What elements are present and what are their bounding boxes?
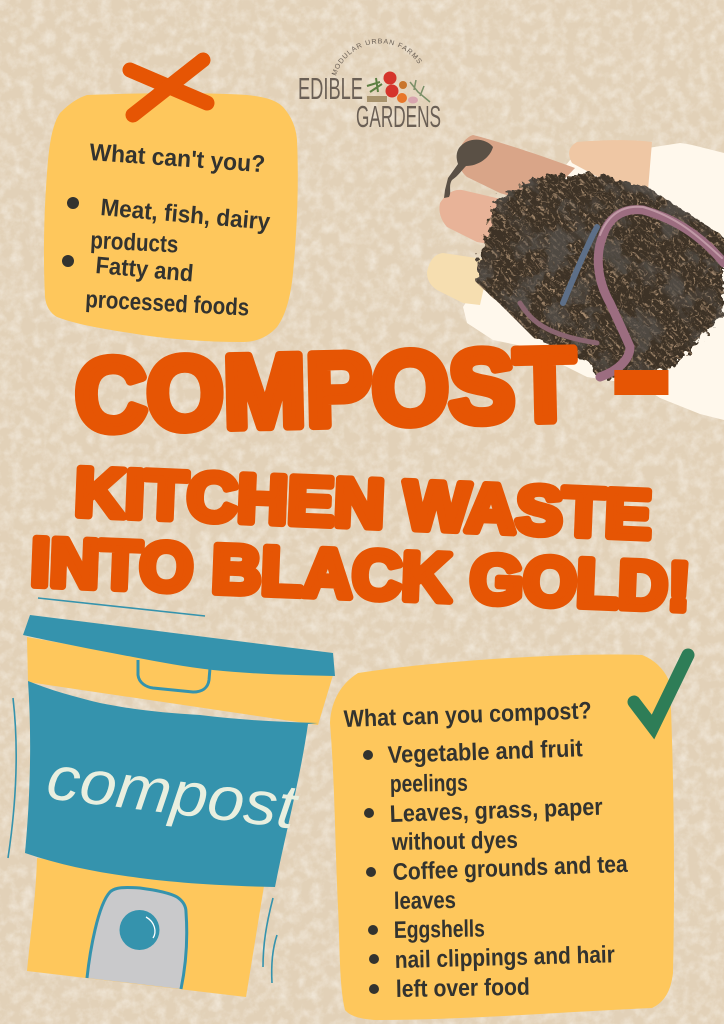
bin body xyxy=(25,681,318,887)
icon: red cross xyxy=(130,60,207,115)
list: can compost: left over food xyxy=(396,974,530,1003)
bin label: compost xyxy=(43,743,303,843)
title dash: - xyxy=(606,247,677,482)
list: can't compost: processed foods xyxy=(85,286,250,322)
bin lid xyxy=(23,615,335,676)
list: can't compost: Meat, fish, dairy xyxy=(99,194,272,236)
list: can't compost xyxy=(62,194,272,322)
bin base xyxy=(27,858,264,997)
hand: ring finger xyxy=(427,253,490,305)
motion lines xyxy=(8,598,277,983)
list: can compost: Coffee grounds and tea xyxy=(392,851,629,886)
logo: edible gardens: GARDENS xyxy=(356,99,441,134)
hand: top finger xyxy=(569,140,652,190)
panel: what you can't compost xyxy=(44,60,298,342)
list: can compost: without dyes xyxy=(391,827,518,856)
logo: edible gardens xyxy=(298,38,441,134)
title line 2: KITCHEN WASTE xyxy=(73,454,653,553)
list: can compost xyxy=(363,735,629,1003)
bin button xyxy=(120,910,160,950)
icon: green check xyxy=(634,655,688,727)
worms xyxy=(520,207,724,377)
list: can compost: Leaves, grass, paper xyxy=(389,794,603,828)
list: can't compost: Fatty and xyxy=(94,252,194,288)
title line 3: INTO BLACK GOLD! xyxy=(29,524,692,625)
logo: edible gardens: MODULAR URBAN FARMS xyxy=(332,38,422,76)
hand: middle finger xyxy=(439,190,505,245)
title: COMPOST xyxy=(74,327,576,453)
photo: hand holding compost and worms xyxy=(427,135,724,420)
logo: edible gardens: EDIBLE xyxy=(298,71,363,106)
list: can compost: leaves xyxy=(394,887,456,915)
heading: what can you compost: What can you compost? xyxy=(343,697,592,733)
icon: vegetables xyxy=(367,72,430,104)
list: can compost: peelings xyxy=(390,770,468,798)
hand: index finger xyxy=(458,135,575,205)
bin rim xyxy=(27,637,333,725)
heading: what can't you: What can't you? xyxy=(89,139,266,178)
illustration: compost bin xyxy=(8,598,335,997)
hand: palm xyxy=(463,143,724,420)
soil mound xyxy=(470,165,724,385)
list: can compost: nail clippings and hair xyxy=(394,941,615,974)
title xyxy=(29,247,692,625)
soil on fingertip xyxy=(444,140,493,198)
bin door xyxy=(87,887,187,989)
list: can compost: Eggshells xyxy=(394,915,485,944)
list: can compost: Vegetable and fruit xyxy=(387,735,583,769)
panel: what you can compost xyxy=(330,654,688,1020)
list: can't compost: products xyxy=(90,227,179,259)
bin handle xyxy=(138,660,210,692)
